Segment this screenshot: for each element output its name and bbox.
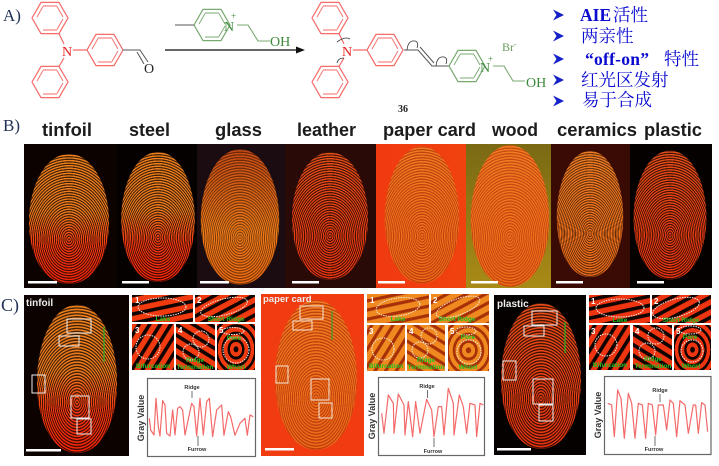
product 36: OH [526,76,546,91]
minutiae insets [367,292,489,371]
minutiae insets: 5 [676,327,681,336]
feature list: 活性 [613,5,648,25]
product 36: - [514,40,517,49]
minutiae insets: 5 [450,327,455,336]
minutiae insets: Ridge [644,356,662,363]
minutiae insets: Pore [683,334,698,341]
minutiae insets: 5 [219,326,224,335]
minutiae insets: Whorl [227,364,245,371]
product 36: 36 [398,104,408,115]
reaction arrow [165,46,305,54]
fingerprint: leather [285,144,376,288]
substrate headings: plastic [644,120,702,140]
substrate headings: glass [215,120,262,140]
chart: gray value paper card: Gray Value [367,393,377,439]
chart: gray value paper card: Ridge [419,384,435,390]
fingerprint: tinfoil [24,144,117,288]
reagent: pyridinium: OH [270,35,290,50]
panel: plastic detail [494,293,711,455]
substrate headings: steel [129,120,170,140]
minutiae insets: 1 [370,296,375,305]
fingerprint: wood [466,144,551,288]
feature list: 红光区发射 [581,70,669,90]
minutiae insets: 1 [135,296,140,305]
panel C label: C) [1,295,19,316]
minutiae insets: 1 [591,297,596,306]
chart: gray value tinfoil: Ridge [184,385,200,391]
substrate headings: ceramics [557,120,637,140]
fingerprint: tinfoil large: tinfoil [26,298,53,309]
panel: tinfoil detail [24,293,256,456]
minutiae insets: 4 [409,327,414,336]
substrate headings [42,120,702,140]
chart: gray value paper card [367,378,484,456]
fingerprint: plastic large: plastic [497,299,529,310]
substrate headings: tinfoil [42,120,92,140]
fingerprint: paper card large [261,294,364,456]
fingerprint: paper card large: paper card [263,294,312,305]
minutiae insets: Short Ridge [663,317,700,324]
panel B label: B) [3,116,20,135]
minutiae insets: Whorl [682,363,700,370]
minutiae insets: 4 [178,326,183,335]
minutiae insets: Bifurcation [136,363,170,370]
minutiae insets: Lake [613,317,628,324]
chart: gray value plastic: Ridge [652,388,668,394]
feature list: AIE [580,5,611,25]
minutiae insets: Lake [391,316,406,323]
minutiae insets: 2 [433,296,438,305]
feature list: “off-on” [585,49,649,69]
fingerprint: ceramics [551,144,630,288]
fingerprint: glass [197,144,285,288]
feature list: 特性 [664,49,699,69]
minutiae insets: 3 [135,326,140,335]
minutiae insets: 4 [635,327,640,336]
minutiae insets: Lake [156,316,171,323]
minutiae insets [589,293,711,370]
minutiae insets: Bifurcation [593,362,627,369]
minutiae insets: 2 [654,297,659,306]
reagent: pyridinium: + [231,11,236,21]
minutiae insets: 3 [591,327,596,336]
fingerprint strip [24,144,712,288]
minutiae insets: Termination [635,363,671,370]
substrate headings: leather [297,120,356,140]
reagent: pyridinium: N [224,20,234,35]
chart: gray value tinfoil [136,378,256,456]
minutiae insets: Termination [177,364,213,371]
chart: gray value plastic [593,376,711,454]
substrate headings: paper card [383,120,476,140]
feature list: 两亲性 [581,26,634,46]
feature list: 易于合成 [582,90,652,110]
chart: gray value tinfoil: Furrow [188,447,207,453]
reactant: aldehyde: N [62,45,72,60]
feature list [553,5,699,110]
fingerprint: paper card [376,144,466,288]
minutiae insets: Bifurcation [369,363,403,370]
reagent: pyridinium [175,9,290,50]
fingerprint: plastic large [494,295,586,455]
minutiae insets: Pore [461,334,476,341]
product 36: N [480,61,490,76]
fingerprint: plastic [630,144,712,288]
chart: gray value plastic: Gray Value [593,392,603,438]
reactant: aldehyde [32,2,154,98]
substrate headings: wood [491,120,538,140]
minutiae insets: Whorl [459,364,477,371]
panel: paper card detail [261,292,489,456]
chart: gray value paper card: Furrow [424,449,443,455]
minutiae insets: Short Ridge [208,316,245,323]
minutiae insets: Pore [227,335,242,342]
chart: gray value tinfoil: Gray Value [136,395,146,441]
fingerprint: steel [117,144,197,288]
minutiae insets: 2 [197,296,202,305]
minutiae insets: 3 [369,327,374,336]
product 36 [312,2,546,115]
fingerprint: tinfoil large [24,295,129,456]
minutiae insets: Termination [408,364,444,371]
product 36: N [342,45,352,60]
minutiae insets: Ridge [417,357,435,364]
chart: gray value plastic: Furrow [645,447,664,453]
panel A label: A) [3,6,21,25]
minutiae insets [132,293,255,371]
product 36: + [488,54,493,64]
minutiae insets: Ridge [186,357,204,364]
product 36: Br [502,40,514,54]
minutiae insets: Short Ridge [439,316,476,323]
reactant: aldehyde: O [144,62,154,77]
